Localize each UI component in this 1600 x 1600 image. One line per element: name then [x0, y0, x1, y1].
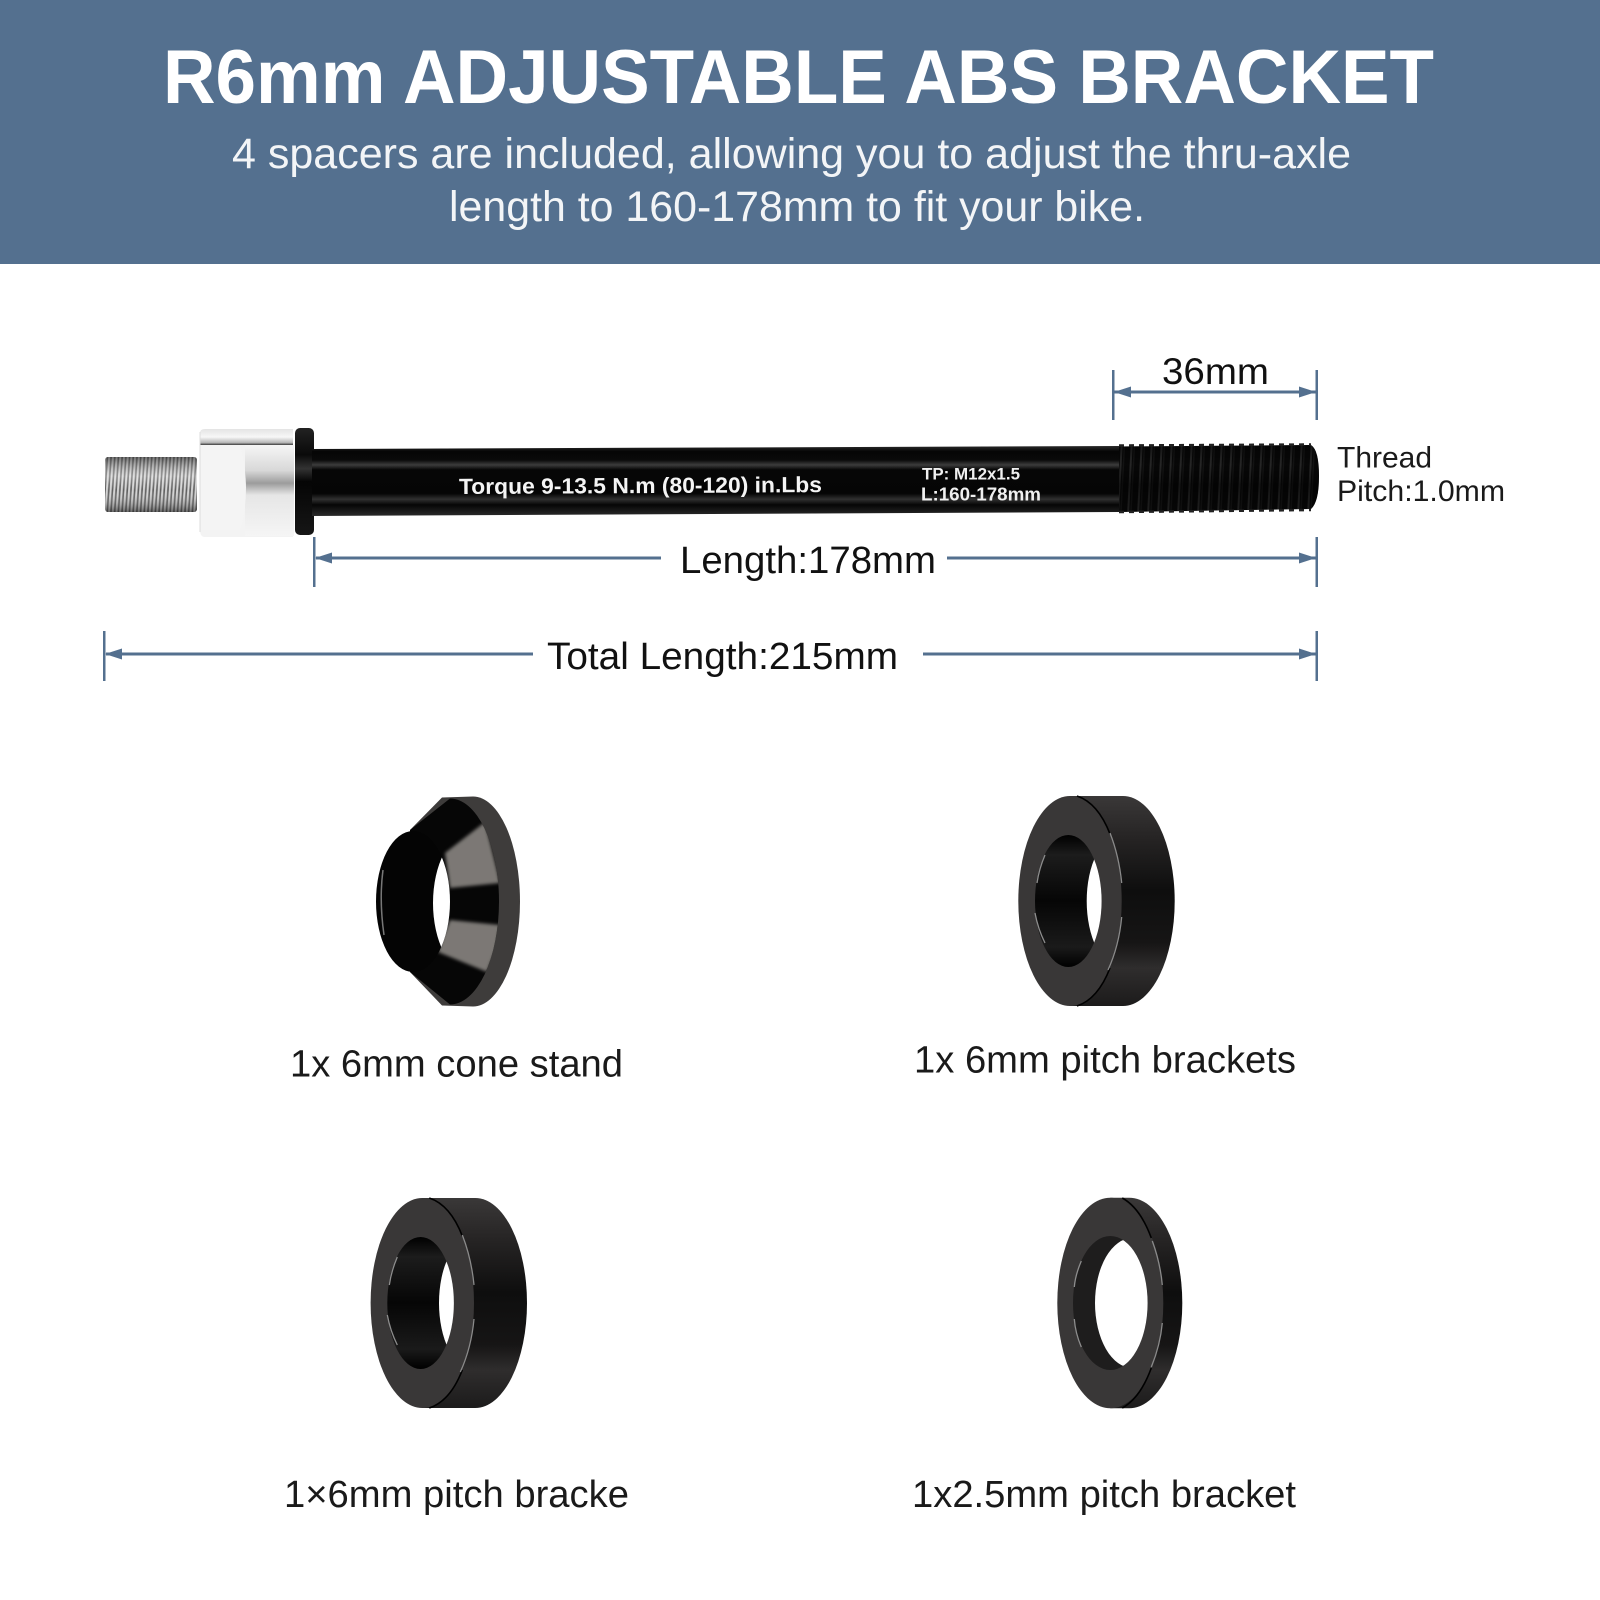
black thread [1119, 444, 1319, 512]
dimension: 36mm: 36mm [1162, 351, 1269, 392]
icon: 6mm pitch bracket (bottom left) [371, 1198, 527, 1408]
subtitle line 1: 4 spacers are included, allowing you to adjust the thru-axle [232, 130, 1351, 178]
caption: cone stand: 1x 6mm cone stand [290, 1044, 623, 1086]
title: R6mm ADJUSTABLE ABS BRACKET [163, 35, 1434, 120]
dimension: 36mm [1112, 351, 1318, 420]
icon: 2.5mm washer [1057, 1198, 1182, 1408]
dimension: length 178mm [313, 537, 1318, 587]
shaft text: length range: L:160-178mm [921, 484, 1041, 504]
caption: 2.5mm pitch bracket: 1x2.5mm pitch bracket [912, 1474, 1296, 1516]
subtitle line 2: length to 160-178mm to fit your bike. [449, 183, 1145, 231]
caption: pitch brackets: 1x 6mm pitch brackets [914, 1040, 1296, 1082]
dimension: total length 215mm: Total Length:215mm [547, 636, 898, 678]
silver nut [200, 429, 294, 537]
icon: 6mm pitch bracket (top right) [1018, 796, 1175, 1006]
icon: cone spacer [376, 796, 520, 1006]
thru-axle product illustration [105, 428, 1319, 537]
dimension: length 178mm: Length:178mm [680, 540, 936, 582]
small silver thread [105, 457, 197, 512]
header band [0, 0, 1600, 264]
label: thread pitch [1337, 442, 1505, 508]
shaft text: torque: Torque 9-13.5 N.m (80-120) in.Lbs [459, 472, 822, 499]
caption: pitch bracke: 1×6mm pitch bracke [284, 1474, 629, 1516]
dimension: total length 215mm [103, 631, 1318, 681]
black flange [295, 428, 314, 535]
black shaft [312, 446, 1119, 516]
label: thread pitch: Thread [1337, 442, 1432, 474]
label: thread pitch: Pitch:1.0mm [1337, 475, 1505, 508]
shaft text: thread pitch: TP: M12x1.5 [922, 464, 1020, 484]
